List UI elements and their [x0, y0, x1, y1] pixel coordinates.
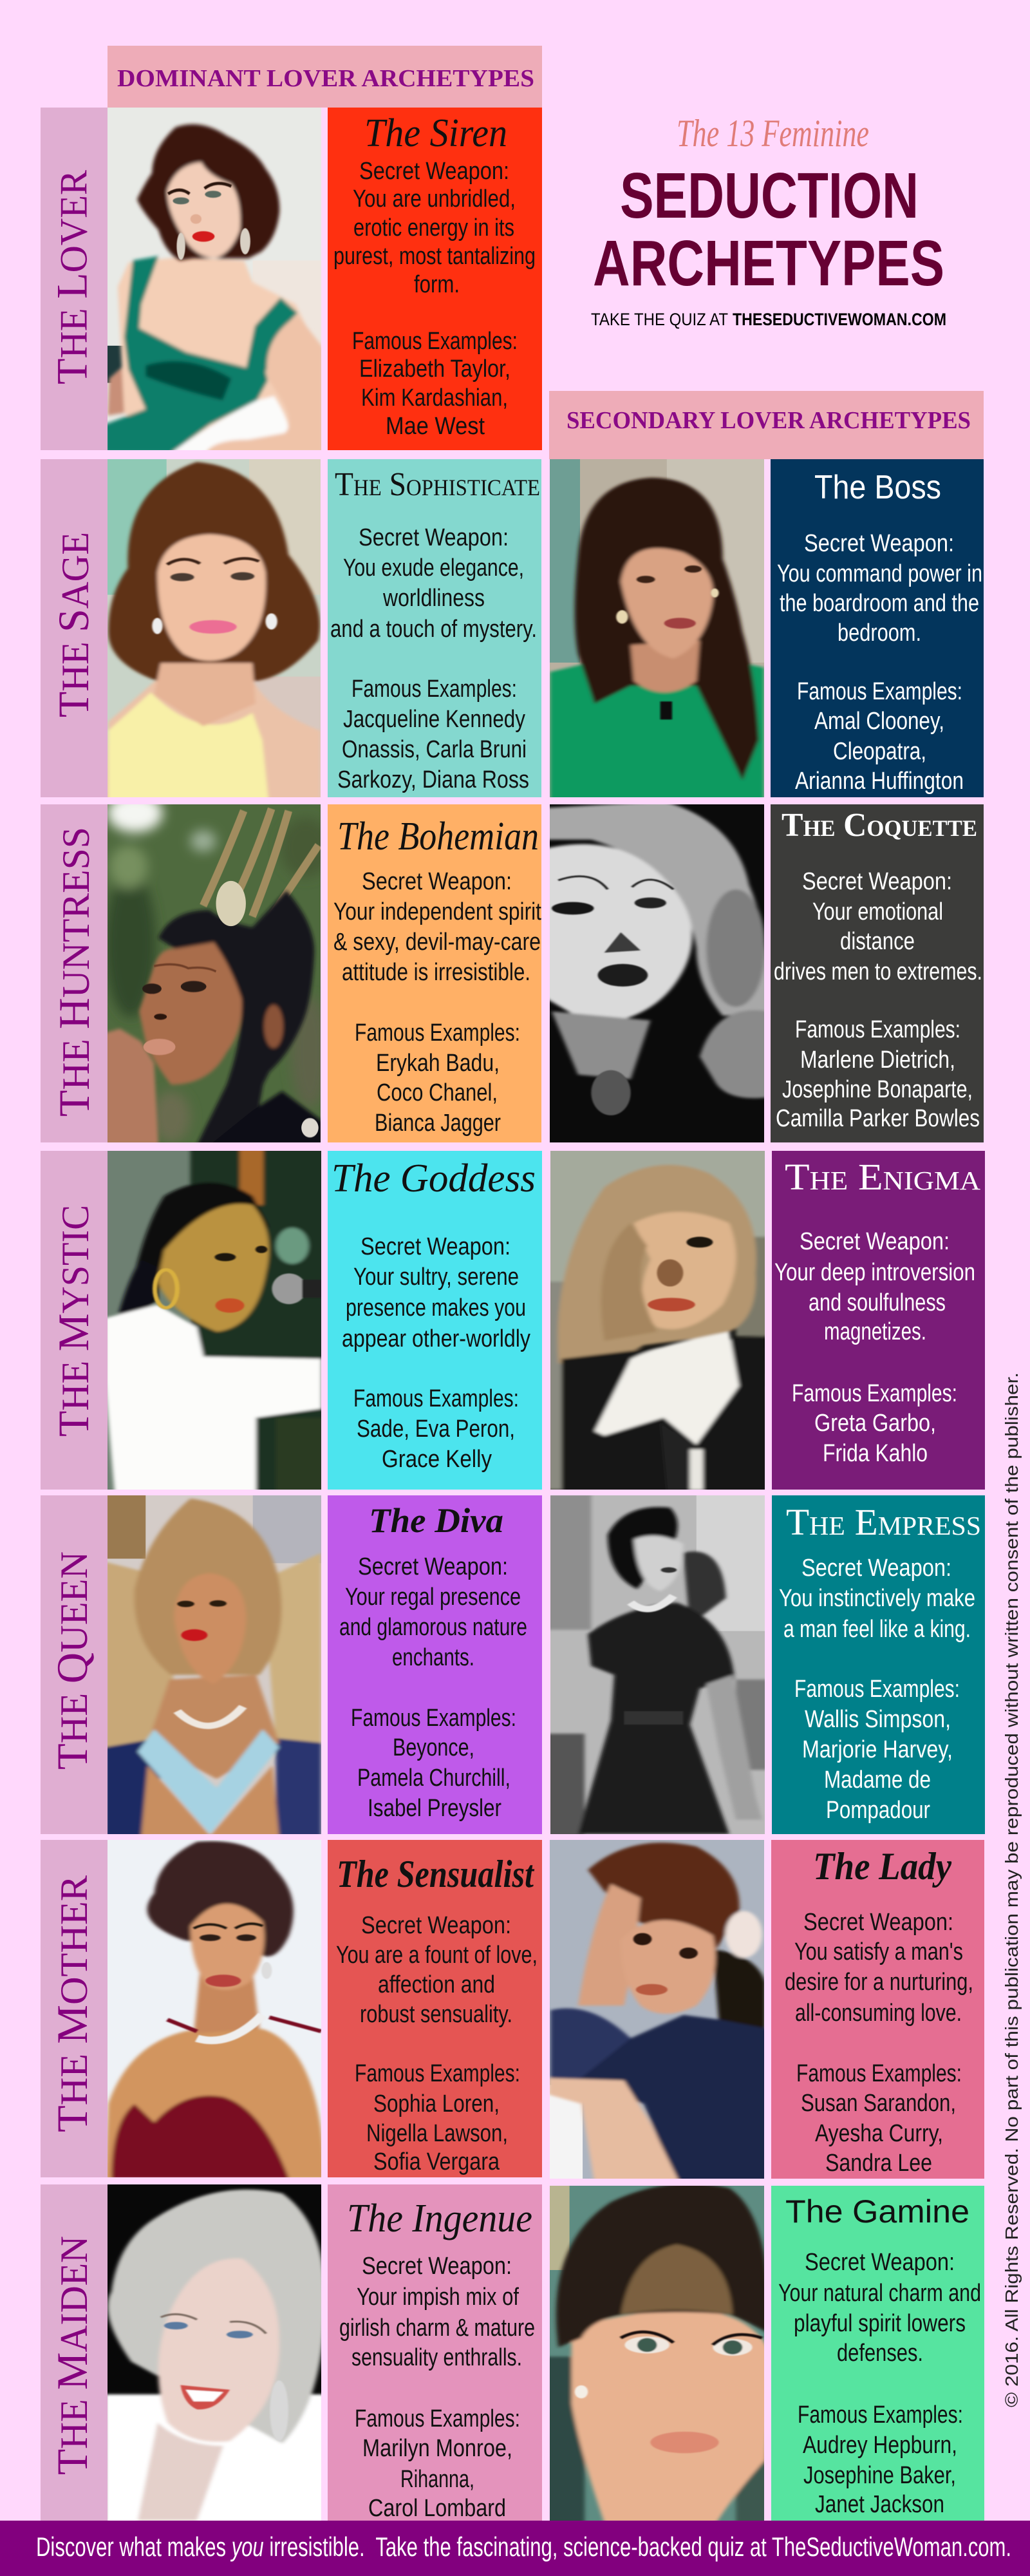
famous examples text: Ayesha Curry,: [815, 2120, 943, 2147]
copyright notice: © 2016. All Rights Reserved. No part of this publication may be reproduced without written consent of the publisher.: [1002, 1372, 1022, 2407]
panel: the diva: [328, 1495, 542, 1834]
secret weapon text: bedroom.: [838, 620, 921, 647]
secret weapon text: form.: [414, 271, 460, 298]
photo: Elizabeth Taylor: [108, 108, 321, 450]
famous examples text: Susan Sarandon,: [801, 2090, 956, 2117]
secret weapon text: [774, 1228, 975, 1345]
side label: the lover: [41, 108, 108, 450]
famous examples text: Grace Kelly: [382, 1446, 492, 1473]
photo: Jacqueline Kennedy: [108, 459, 321, 797]
secret weapon text: Secret Weapon:: [801, 1555, 951, 1582]
photo: Sade: [108, 1151, 321, 1490]
panel: the siren: [328, 108, 542, 450]
secret weapon text: [333, 868, 541, 986]
secret weapon text: [330, 524, 537, 643]
famous examples text: [351, 1705, 516, 1822]
secret weapon text: and soulfulness: [809, 1289, 946, 1316]
panel: the coquette: [771, 804, 984, 1142]
secret weapon text: enchants.: [392, 1644, 474, 1671]
famous examples text: Sophia Loren,: [373, 2090, 500, 2117]
famous examples text: Janet Jackson: [815, 2491, 944, 2518]
famous examples text: Marilyn Monroe,: [362, 2435, 512, 2462]
famous examples text: Audrey Hepburn,: [803, 2432, 957, 2459]
panel: the gamine: [771, 2186, 984, 2521]
photo: Marlene Dietrich: [550, 804, 764, 1142]
footer banner: [0, 2521, 1030, 2576]
famous examples text: Sofia Vergara: [373, 2148, 500, 2175]
heading: secondary lover archetypes: [549, 391, 984, 459]
secret weapon text: distance: [840, 928, 915, 955]
secret weapon text: [333, 158, 536, 298]
famous examples text: [776, 1016, 980, 1132]
secret weapon text: affection and: [378, 1971, 495, 1998]
title: the coquette: The Coquette: [782, 807, 977, 844]
famous examples text: Erykah Badu,: [376, 1050, 500, 1077]
photo: Beyonce: [108, 1495, 321, 1834]
famous examples text: Nigella Lawson,: [366, 2120, 508, 2147]
famous examples text: Marlene Dietrich,: [800, 1046, 955, 1074]
famous examples text: [796, 2060, 962, 2177]
famous examples text: [798, 2401, 963, 2518]
side label: the sage: [41, 459, 108, 797]
side label: the queen: [41, 1495, 108, 1834]
secret weapon text: worldliness: [382, 585, 485, 612]
secret weapon text: Your emotional: [812, 898, 943, 925]
famous examples text: Elizabeth Taylor,: [359, 355, 510, 383]
panel: the sensualist: [328, 1840, 542, 2177]
side label: the mystic: THE MYSTIC: [49, 1205, 98, 1437]
photo: Marilyn Monroe: [108, 2184, 321, 2521]
photo: Amal Clooney: [550, 459, 764, 797]
quiz line: [591, 310, 946, 329]
famous examples text: Frida Kahlo: [823, 1440, 928, 1467]
secret weapon text: [339, 1553, 527, 1671]
title: the enigma: The Enigma: [785, 1156, 980, 1198]
panel: the lady: [771, 1840, 984, 2179]
side label: the mother: [41, 1840, 108, 2177]
famous examples text: [355, 1019, 520, 1137]
famous examples text: [795, 678, 964, 795]
famous examples text: Amal Clooney,: [814, 708, 944, 735]
secret weapon text: Secret Weapon:: [800, 1228, 950, 1255]
title: the lady: The Lady: [813, 1845, 951, 1888]
secret weapon text: [785, 1909, 973, 2027]
secret weapon text: [339, 2253, 535, 2371]
title: the siren: The Siren: [364, 111, 507, 155]
heading: dominant lover archetypes: DOMINANT LOVER ARCHETYPES: [117, 65, 534, 92]
secret weapon text: [342, 1233, 530, 1352]
panel: the enigma: [772, 1151, 985, 1490]
main title: [593, 160, 944, 299]
secret weapon text: [777, 530, 982, 647]
secret weapon text: Secret Weapon:: [805, 2249, 955, 2276]
panel: the bohemian: [328, 804, 541, 1142]
famous examples text: Wallis Simpson,: [805, 1706, 951, 1733]
famous examples text: [353, 1385, 519, 1473]
secret weapon text: [778, 2249, 981, 2367]
side label: the queen: THE QUEEN: [48, 1551, 97, 1770]
panel: the sophisticate: [328, 459, 541, 797]
famous examples text: [352, 328, 518, 440]
famous examples text: Isabel Preysler: [368, 1795, 501, 1822]
famous examples text: [355, 2060, 520, 2175]
secret weapon text: Secret Weapon:: [362, 2253, 512, 2280]
photo: Susan Sarandon: [550, 1840, 764, 2179]
famous examples text: Beyonce,: [393, 1734, 474, 1761]
side label: the sage: THE SAGE: [49, 532, 98, 717]
secret weapon text: [336, 1912, 538, 2028]
heading: secondary lover archetypes: SECONDARY LOVER ARCHETYPES: [566, 407, 971, 434]
famous examples text: Mae West: [386, 413, 485, 440]
famous examples text: Sandra Lee: [825, 2150, 932, 2177]
side label: the lover: THE LOVER: [48, 170, 97, 384]
secret weapon text: Secret Weapon:: [359, 524, 509, 551]
panel: the ingenue: [328, 2184, 542, 2521]
photo: Wallis Simpson: [550, 1495, 765, 1834]
title block: [591, 112, 946, 329]
footer banner: Discover what makes you irresistible. Take the fascinating, science-backed quiz at TheSeductiveWoman.com.: [36, 2532, 1011, 2562]
secret weapon text: Secret Weapon:: [358, 1553, 508, 1580]
famous examples text: Coco Chanel,: [377, 1079, 498, 1106]
panel: the goddess: [328, 1151, 542, 1490]
secret weapon text: [779, 1555, 975, 1643]
photo: Audrey Hepburn: [550, 2186, 764, 2521]
quiz line: TAKE THE QUIZ AT: [591, 310, 728, 329]
secret weapon text: magnetizes.: [824, 1318, 926, 1345]
secret weapon text: Secret Weapon:: [802, 868, 952, 895]
panel: the empress: [772, 1495, 985, 1834]
famous examples text: [792, 1380, 957, 1467]
famous examples text: Bianca Jagger: [375, 1110, 501, 1137]
side label: the mother: THE MOTHER: [48, 1875, 97, 2132]
famous examples text: Greta Garbo,: [814, 1410, 936, 1437]
famous examples text: Cleopatra,: [833, 738, 926, 765]
famous examples text: Kim Kardashian,: [361, 384, 508, 412]
subtitle: The 13 Feminine: [677, 112, 869, 155]
secret weapon text: Secret Weapon:: [803, 1909, 953, 1936]
side label: the mystic: [41, 1151, 108, 1490]
title: the empress: The Empress: [786, 1501, 981, 1543]
famous examples text: [355, 2405, 520, 2522]
title: the goddess: The Goddess: [332, 1157, 536, 1200]
side label: the maiden: THE MAIDEN: [48, 2236, 97, 2475]
famous examples text: [337, 676, 529, 793]
side label: the maiden: [41, 2184, 108, 2521]
secret weapon text: Secret Weapon:: [362, 868, 512, 895]
famous examples text: Pompadour: [826, 1797, 930, 1824]
secret weapon text: [774, 868, 982, 985]
famous examples text: Rihanna,: [400, 2466, 474, 2493]
title: the gamine: The Gamine: [785, 2193, 969, 2230]
side label: the huntress: THE HUNTRESS: [50, 827, 98, 1117]
secret weapon text: Secret Weapon:: [361, 1912, 511, 1939]
title: the diva: The Diva: [369, 1501, 503, 1540]
secret weapon text: defenses.: [837, 2340, 923, 2367]
photo: Sophia Loren: [108, 1840, 321, 2177]
secret weapon text: Secret Weapon:: [804, 530, 954, 557]
secret weapon text: Secret Weapon:: [359, 158, 509, 185]
photo: Greta Garbo: [550, 1151, 765, 1490]
heading: dominant lover archetypes: [108, 46, 542, 108]
secret weapon text: Secret Weapon:: [360, 1233, 510, 1260]
photo: Erykah Badu: [108, 804, 321, 1142]
title: the boss: The Boss: [814, 469, 941, 506]
famous examples text: [794, 1676, 960, 1824]
side label: the huntress: [41, 804, 108, 1142]
title: the ingenue: The Ingenue: [347, 2197, 532, 2240]
panel: the boss: [771, 459, 984, 797]
famous examples text: Marjorie Harvey,: [802, 1736, 953, 1763]
famous examples text: Madame de: [824, 1766, 931, 1794]
